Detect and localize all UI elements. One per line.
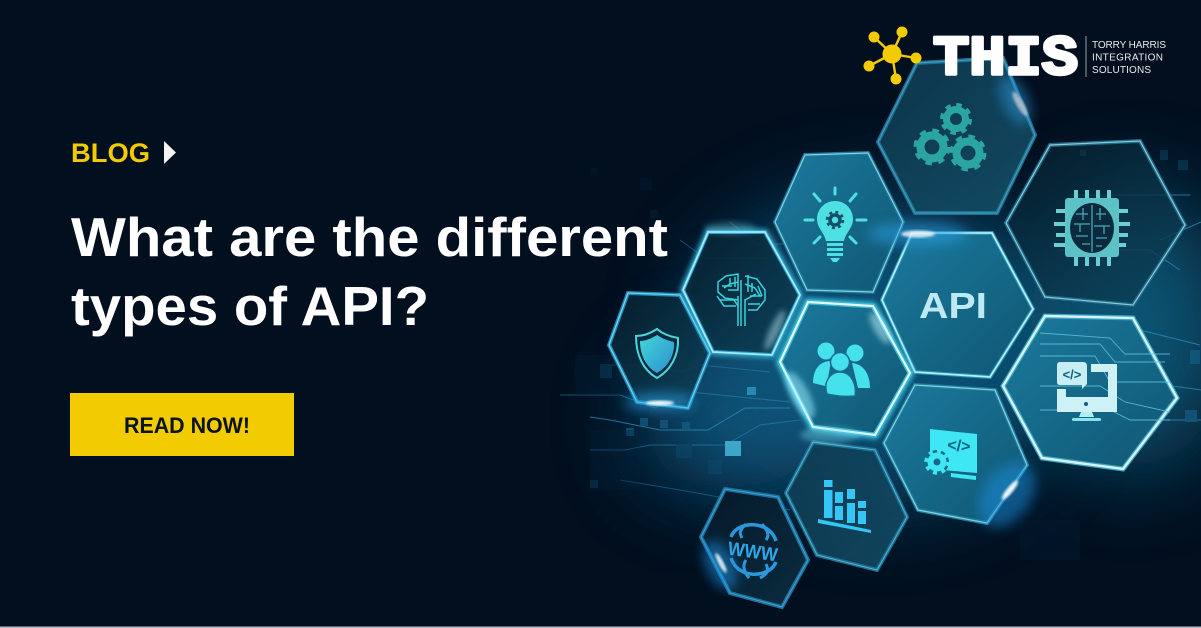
- logo icon: network: [864, 26, 922, 84]
- logo tagline: INTEGRATION: [1092, 52, 1163, 64]
- label: API: API: [919, 285, 987, 326]
- icon: www globe: WWW: [726, 539, 779, 566]
- hexagon: chip brain: [1006, 141, 1185, 305]
- circuit lines background: [560, 150, 1201, 560]
- logo tagline: SOLUTIONS: [1092, 65, 1151, 76]
- blog label: BLOG: [71, 138, 150, 168]
- icon: gears: [916, 106, 984, 169]
- hexagon: chart: [786, 442, 907, 570]
- title: What are the different: [71, 206, 668, 268]
- title: types of API?: [71, 275, 429, 337]
- icon: code settings: </>: [947, 437, 971, 456]
- hexagon: gears: [878, 58, 1035, 213]
- logo tagline: [1092, 40, 1166, 76]
- logo: [864, 26, 1166, 91]
- light flares: [624, 71, 1047, 594]
- logo tagline: TORRY HARRIS: [1092, 40, 1166, 51]
- icon: chip brain: [1054, 190, 1130, 266]
- icon: shield: [636, 329, 678, 378]
- hexagon: monitor: [1003, 316, 1177, 469]
- hexagon: API: [882, 233, 1033, 377]
- icon: circuit brain: [717, 274, 765, 326]
- logo wordmark: THIS: [933, 27, 1078, 91]
- icon: people: [813, 342, 870, 396]
- hexagon: people: [780, 302, 910, 435]
- hexagon: lightbulb: [775, 153, 903, 292]
- button: READ NOW!: [124, 413, 250, 438]
- logo divider: [1086, 36, 1087, 77]
- icon: monitor code: [1057, 362, 1117, 421]
- icon: monitor code: </>: [1063, 367, 1082, 382]
- arrow: [164, 141, 176, 164]
- icon: lightbulb: [805, 188, 866, 262]
- hexagon: shield: [609, 293, 710, 408]
- hexagon: code: [884, 385, 1027, 523]
- icon: code settings: [925, 429, 977, 480]
- hexagon: www: [701, 489, 808, 607]
- button: [70, 393, 294, 456]
- title: [71, 206, 668, 337]
- icon: bar chart: [818, 480, 871, 533]
- hexagon: circuit brain: [683, 232, 800, 355]
